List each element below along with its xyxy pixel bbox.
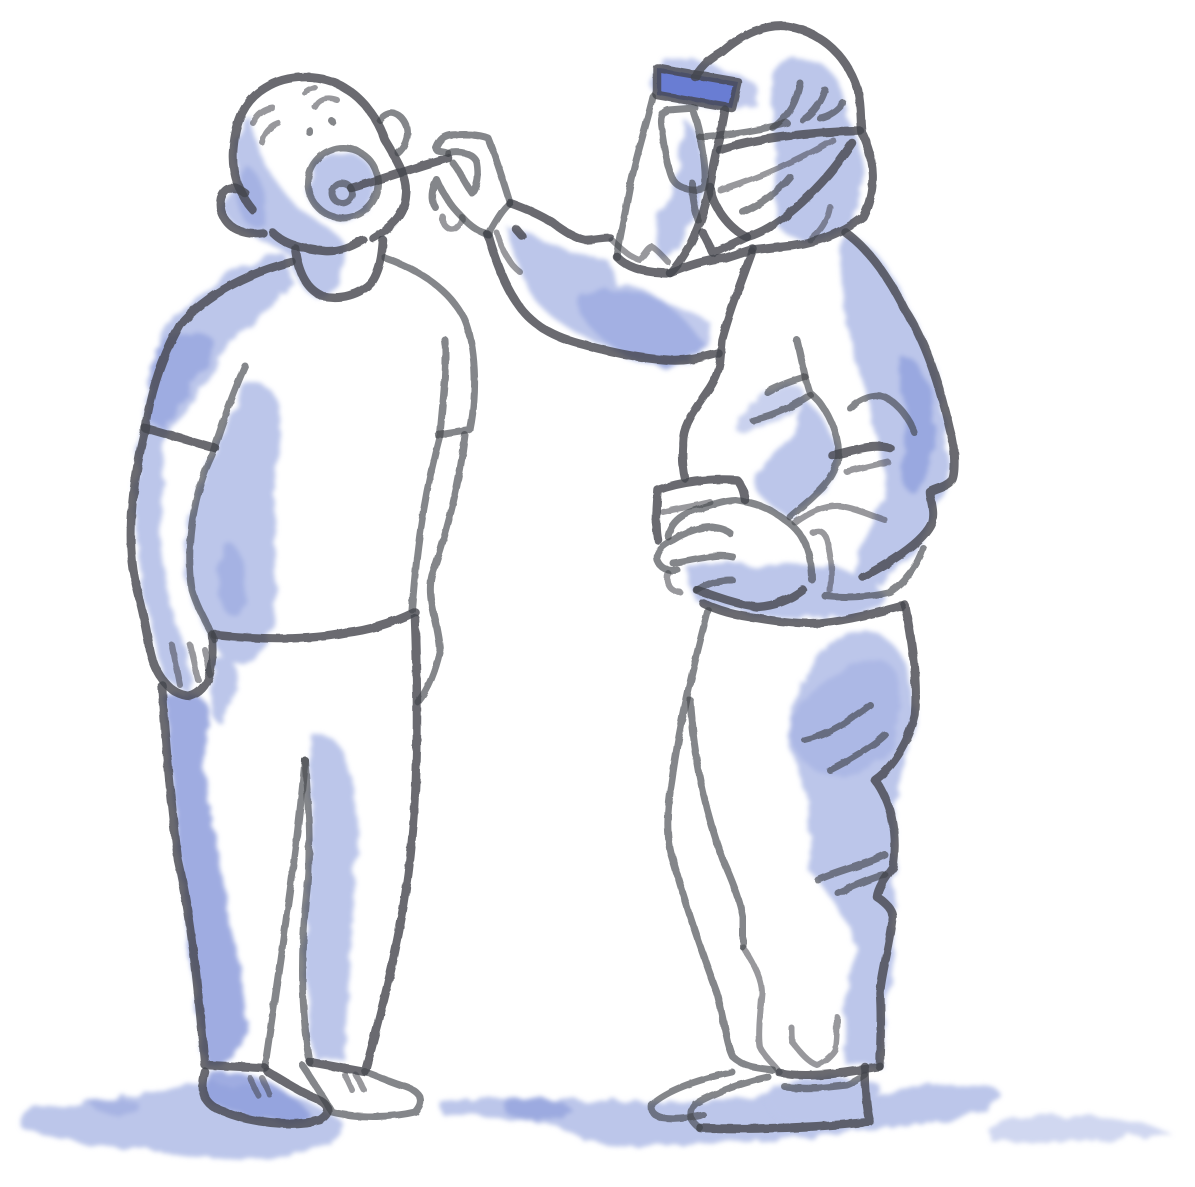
trousers bbox=[162, 685, 265, 1068]
trouser folds bbox=[805, 705, 885, 893]
coverall torso bbox=[683, 252, 752, 478]
health worker line drawing bbox=[433, 26, 954, 1129]
trouser hem fold bbox=[792, 1017, 837, 1065]
head outline bbox=[233, 77, 406, 238]
ground shadow wash bbox=[20, 1071, 1172, 1160]
face shield bbox=[617, 97, 653, 257]
visor band bbox=[657, 68, 738, 108]
mouth bbox=[308, 148, 378, 218]
swab bbox=[332, 183, 352, 203]
shoes bbox=[203, 1072, 328, 1124]
cuff bbox=[488, 203, 510, 235]
gloved hand bbox=[436, 134, 510, 203]
patient shading wash bbox=[135, 115, 377, 1066]
chin bbox=[295, 240, 383, 297]
face details bbox=[253, 88, 337, 142]
patient line drawing bbox=[131, 77, 475, 1124]
t-shirt bbox=[131, 262, 292, 696]
health worker shading wash bbox=[505, 59, 947, 1125]
hood folds bbox=[773, 83, 843, 128]
cup bbox=[656, 479, 745, 540]
waist band bbox=[703, 603, 902, 623]
eyes bbox=[309, 121, 333, 132]
jaw line bbox=[273, 233, 363, 251]
trousers bbox=[668, 610, 773, 1070]
left ear bbox=[220, 188, 263, 234]
sleeve cuff bbox=[813, 532, 831, 590]
hood bbox=[695, 26, 873, 250]
raised arm bbox=[510, 203, 610, 240]
lower hand and sleeve bbox=[668, 500, 812, 580]
right ear bbox=[380, 113, 407, 153]
mask bbox=[700, 123, 787, 137]
boots bbox=[652, 1072, 732, 1119]
